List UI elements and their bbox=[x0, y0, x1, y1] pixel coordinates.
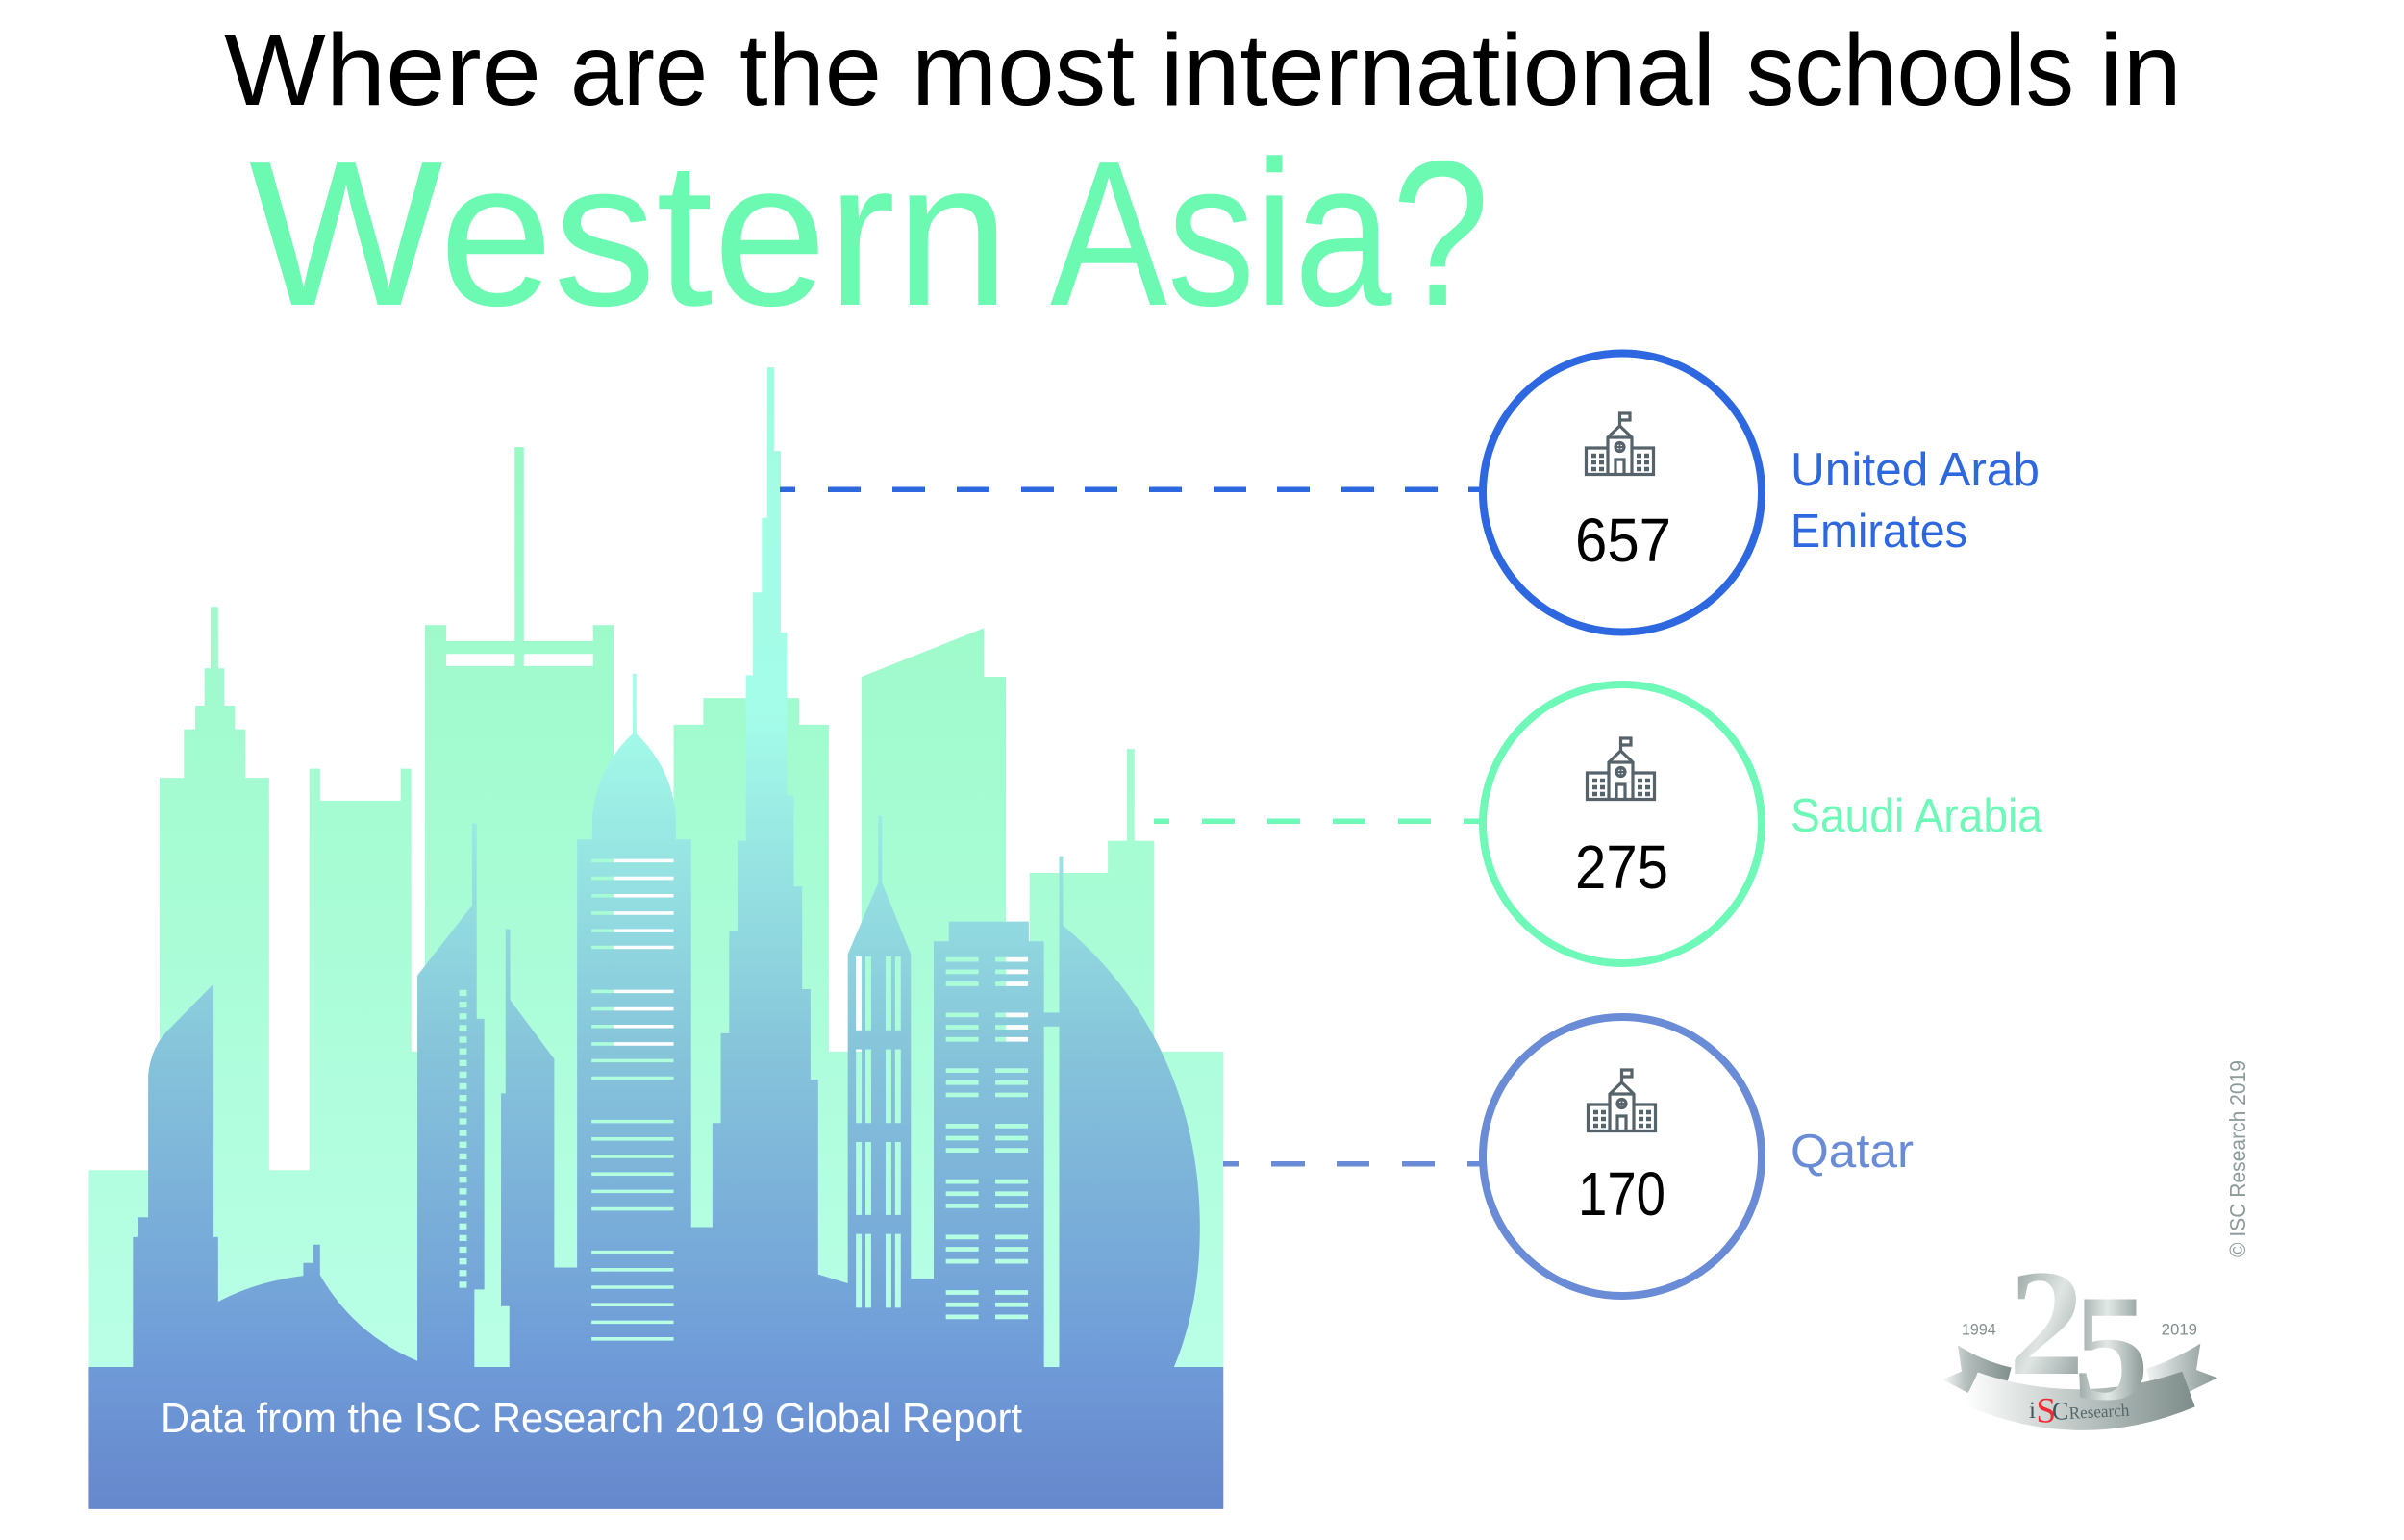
connector dashes: Qatar bbox=[1223, 1161, 1483, 1167]
number: 657: 657 bbox=[1575, 506, 1671, 575]
wordmark bbox=[2029, 1391, 2130, 1430]
wordmark: S bbox=[2036, 1391, 2056, 1430]
heading: Western Asia: Western bbox=[249, 117, 1010, 349]
panel: Saudi Arabia bbox=[1483, 684, 2043, 963]
ribbon band bbox=[1965, 1372, 2195, 1430]
panel: United Arab Emirates bbox=[1483, 354, 2040, 633]
connector dashes: Saudi Arabia bbox=[1154, 819, 1483, 824]
icon: school building bbox=[1587, 738, 1654, 800]
heading: question line: are bbox=[570, 13, 708, 127]
title bbox=[224, 13, 2182, 349]
heading: question line: most bbox=[912, 13, 1135, 127]
heading: Western Asia: Asia? bbox=[1050, 117, 1490, 349]
ribbon tail left bbox=[1942, 1345, 2012, 1393]
icon: school building bbox=[1587, 413, 1654, 475]
skyline: front layer of blue towers with footer band bbox=[88, 367, 1223, 1509]
label: Saudi Arabia: Saudi Arabia bbox=[1790, 790, 2043, 842]
circle: UAE bbox=[1483, 354, 1762, 633]
heading: question line: in bbox=[2099, 13, 2182, 127]
ribbon tail right bbox=[2146, 1344, 2217, 1392]
numeral 2: 2 bbox=[2009, 1239, 2085, 1407]
heading: question line: Where bbox=[224, 13, 541, 127]
label: United Arab Emirates: Emirates bbox=[1790, 506, 1967, 558]
footer note: data source: Data from the ISC Research 2019 Global Report bbox=[161, 1395, 1022, 1442]
years bbox=[1962, 1320, 2197, 1338]
heading: question line: international bbox=[1161, 13, 1715, 127]
numeral 5: 5 bbox=[2073, 1264, 2149, 1432]
number: 170: 170 bbox=[1578, 1159, 1665, 1229]
connector dashes: UAE bbox=[780, 486, 1484, 492]
wordmark: i bbox=[2029, 1397, 2036, 1424]
label: Qatar: Qatar bbox=[1790, 1126, 1914, 1178]
heading: question line bbox=[224, 13, 2182, 127]
label: United Arab Emirates: United Arab bbox=[1790, 444, 2040, 496]
label: United Arab Emirates bbox=[1790, 444, 2040, 558]
years: 2019 bbox=[2162, 1320, 2197, 1338]
copyright note: © ISC Research 2019 bbox=[2225, 1060, 2250, 1257]
circle: Qatar bbox=[1483, 1017, 1762, 1296]
icon: school building bbox=[1589, 1070, 1656, 1130]
panel: Qatar bbox=[1483, 1017, 1914, 1296]
circle: Saudi Arabia bbox=[1483, 684, 1762, 963]
heading: question line: schools bbox=[1746, 13, 2074, 127]
chart: skyline illustration bbox=[88, 367, 1223, 1509]
heading: question line: the bbox=[739, 13, 882, 127]
years: 1994 bbox=[1962, 1320, 1996, 1338]
skyline: back layer of mint towers bbox=[88, 447, 1223, 1369]
wordmark: Research bbox=[2068, 1401, 2130, 1423]
wordmark: C bbox=[2052, 1398, 2068, 1426]
number: 275: 275 bbox=[1575, 832, 1668, 902]
heading: Western Asia bbox=[249, 117, 1490, 349]
logo: ISC Research 25 years bbox=[1942, 1239, 2217, 1432]
